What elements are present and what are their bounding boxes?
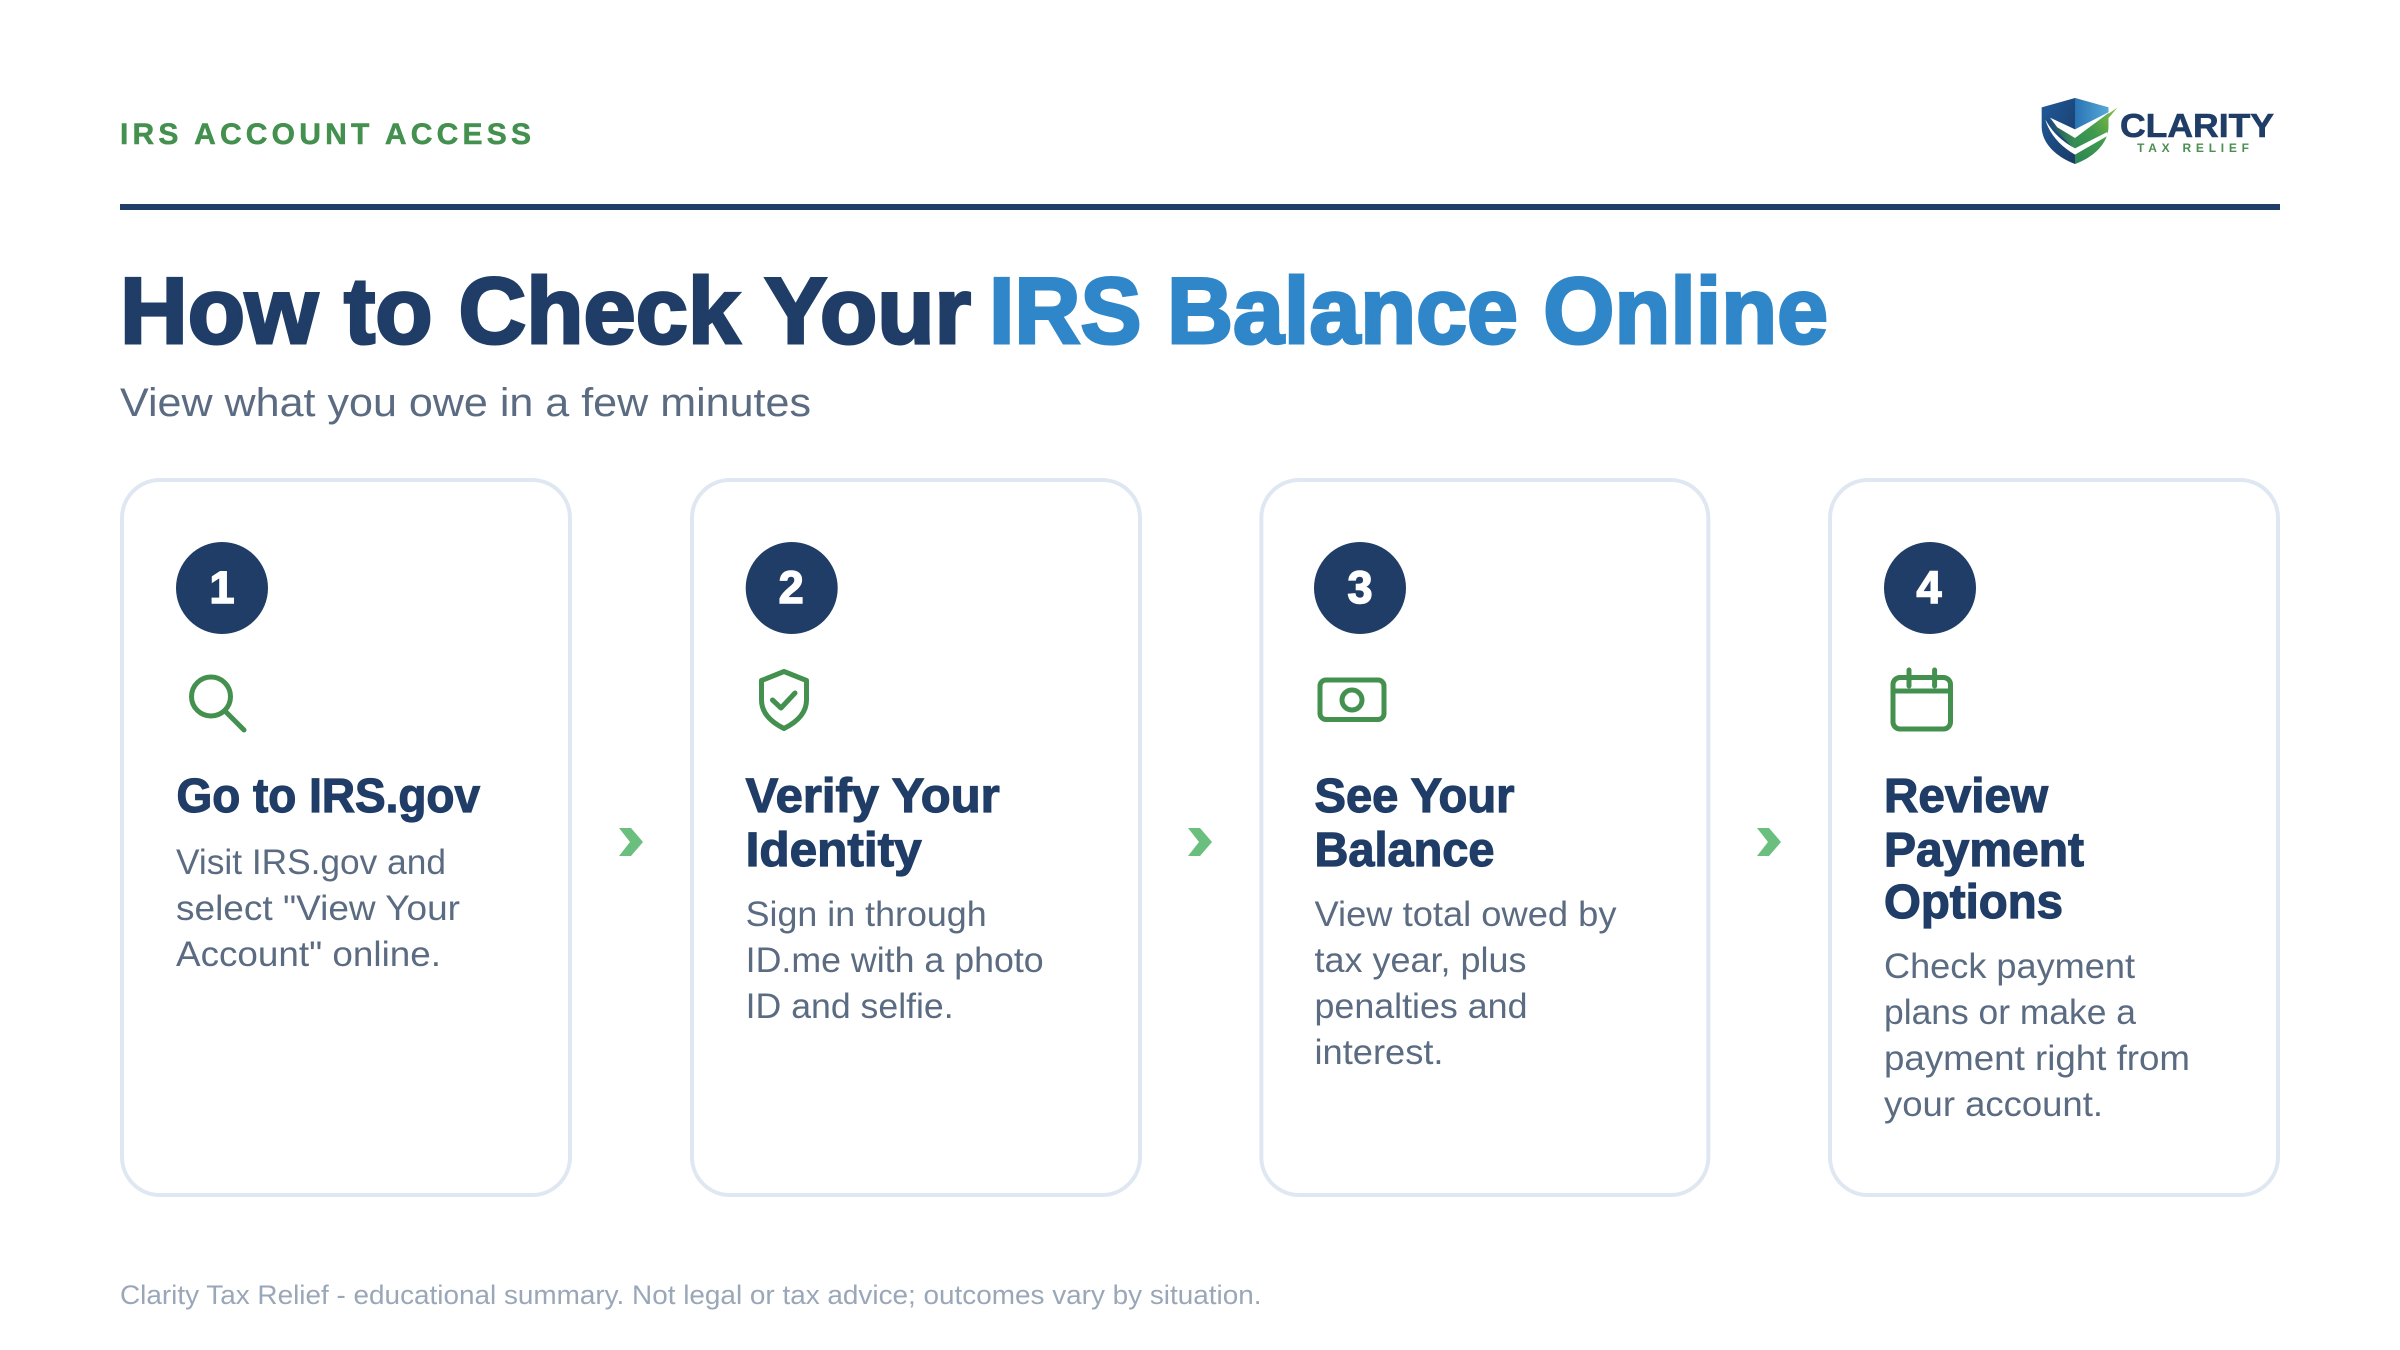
icon: magnifying glass (192, 677, 244, 730)
heading: Verify Your Identity (746, 770, 1000, 877)
arrow 3 (1757, 828, 1781, 856)
icon: logo shield (2042, 98, 2117, 164)
step number 4: 4 (1916, 562, 1942, 613)
step number 4 (1884, 542, 1976, 634)
step 3 description: penalties and (1314, 987, 1528, 1026)
step 1 description (176, 843, 460, 974)
heading: See Your Balance: See Your (1314, 770, 1514, 823)
step number 2: 2 (779, 562, 804, 613)
step number 1 (176, 542, 268, 634)
logo wordmark: CLARITY (2120, 107, 2274, 144)
step 2 description: ID and selfie. (746, 987, 954, 1026)
step number 3: 3 (1347, 562, 1373, 613)
arrow 1 (619, 828, 643, 856)
heading: Review Payment Options: Review (1884, 770, 2049, 823)
step 4 description: plans or make a (1884, 993, 2137, 1032)
logo: Clarity Tax Relief (2042, 98, 2274, 164)
title: IRS Balance Online (989, 258, 1828, 363)
step number 3 (1314, 542, 1406, 634)
eyebrow label: IRS ACCOUNT ACCESS (120, 118, 531, 151)
heading: See Your Balance (1314, 770, 1514, 877)
title: How to Check Your (120, 258, 971, 363)
step 1 description: select "View Your (176, 889, 460, 928)
heading: See Your Balance: Balance (1314, 824, 1494, 877)
panel: step 1 (122, 480, 570, 1195)
icon: shield check (762, 672, 806, 728)
footer disclaimer: Clarity Tax Relief - educational summary. Not legal or tax advice; outcomes vary by situation. (120, 1280, 1262, 1310)
step 3 description: interest. (1314, 1033, 1444, 1072)
panel: step 3 (1261, 480, 1708, 1195)
arrow 2 (1188, 828, 1212, 856)
panel: step 2 (692, 480, 1140, 1195)
step 2 description (746, 895, 1044, 1026)
title (120, 258, 1828, 363)
step 4 description: Check payment (1884, 947, 2135, 986)
step number 1: 1 (209, 562, 235, 613)
logo tagline: TAX RELIEF (2137, 141, 2249, 155)
heading: Review Payment Options: Payment (1884, 824, 2084, 877)
panel: step 4 (1830, 480, 2278, 1195)
step 4 description: payment right from (1884, 1039, 2190, 1078)
heading: Verify Your Identity: Verify Your (746, 770, 1000, 823)
step 2 description: ID.me with a photo (746, 941, 1044, 980)
heading: Review Payment Options: Options (1884, 876, 2063, 929)
step number 2 (746, 542, 838, 634)
step 1 description: Visit IRS.gov and (176, 843, 446, 882)
heading: Verify Your Identity: Identity (746, 824, 922, 877)
step 3 description: tax year, plus (1314, 941, 1526, 980)
step 2 description: Sign in through (746, 895, 987, 934)
icon: calendar (1893, 670, 1950, 729)
step 1 description: Account" online. (176, 935, 441, 974)
step 3 description (1314, 895, 1617, 1072)
heading: Review Payment Options (1884, 770, 2084, 929)
subtitle: View what you owe in a few minutes (120, 381, 811, 425)
header rule (120, 204, 2280, 210)
icon: banknote (1320, 680, 1384, 720)
step 3 description: View total owed by (1314, 895, 1617, 934)
heading: Go to IRS.gov: Go to IRS.gov (176, 770, 480, 823)
step 4 description (1884, 947, 2190, 1124)
step 4 description: your account. (1884, 1085, 2103, 1124)
